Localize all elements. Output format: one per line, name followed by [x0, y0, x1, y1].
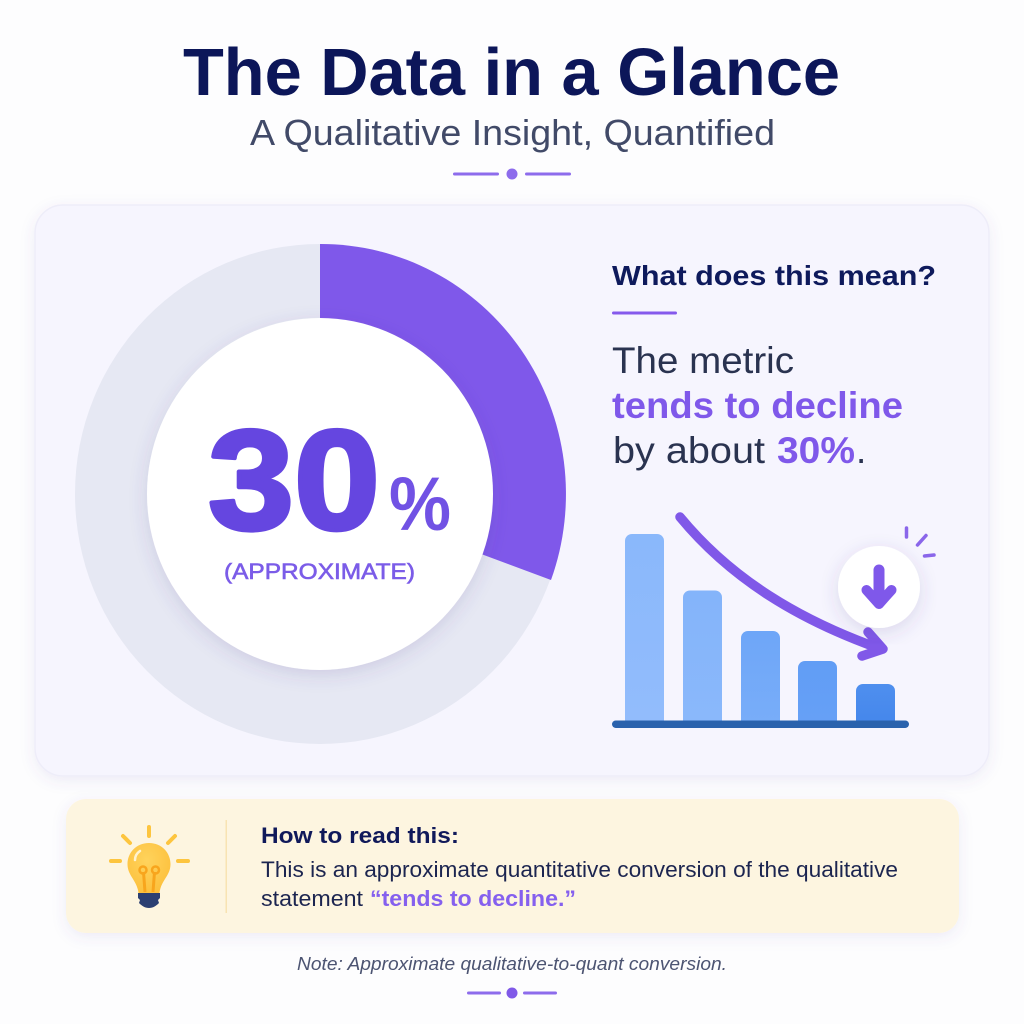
footer divider: [467, 988, 557, 998]
callout: how to read this: [66, 799, 959, 933]
panel: main data card: [35, 205, 989, 776]
callout body text: [261, 857, 898, 911]
callout heading: How to read this:: [261, 823, 459, 848]
arrow: downward trend curve: [680, 517, 883, 656]
statement text: by about: [613, 430, 766, 471]
callout divider: [226, 820, 227, 913]
callout body text: statement: [261, 886, 363, 911]
callout body text: “tends to decline.”: [370, 886, 576, 911]
footnote: Note: Approximate qualitative-to-quant conversion.: [297, 954, 727, 974]
donut chart: [75, 244, 566, 744]
statement text: tends to decline: [612, 385, 903, 426]
bar chart: declining bars: [612, 534, 909, 728]
statement text: [612, 340, 903, 471]
approximate label: (APPROXIMATE): [224, 559, 415, 584]
statement text: 30%: [777, 430, 855, 471]
header divider: [453, 168, 571, 180]
callout body text: This is an approximate quantitative conversion of the qualitative: [261, 857, 898, 882]
donut value: 30%: 30: [208, 401, 380, 560]
percent sign: %: [389, 462, 451, 547]
heading: what does this mean: What does this mean?: [612, 260, 936, 291]
statement text: The metric: [612, 340, 794, 381]
heading underline: [612, 312, 677, 314]
statement text: .: [856, 430, 866, 471]
subtitle: A Qualitative Insight, Quantified: [250, 112, 775, 153]
icon: light bulb: [111, 827, 188, 908]
icon: down arrow badge: [838, 528, 934, 628]
title: The Data in a Glance: [183, 35, 840, 110]
